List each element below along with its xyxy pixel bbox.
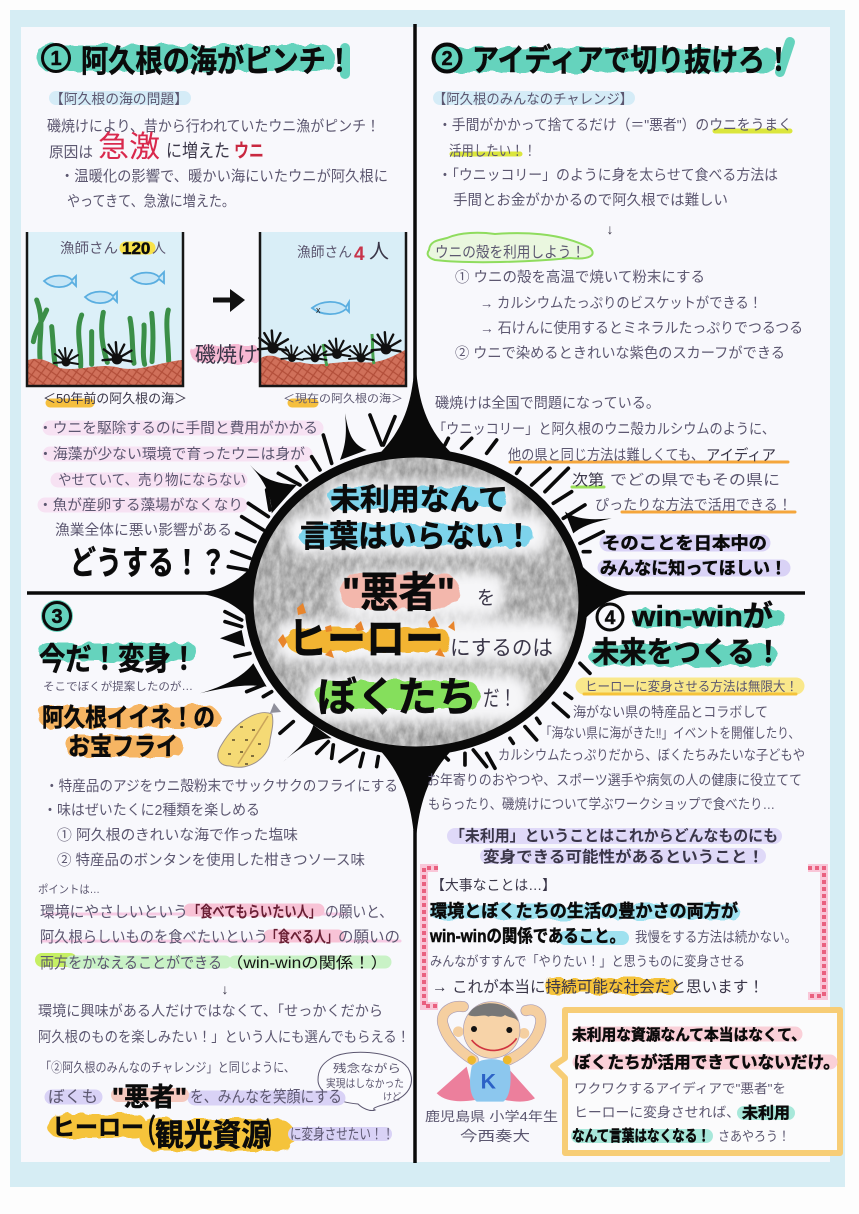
problem list with pink marker	[38, 420, 318, 539]
speech bubble: 残念ながら: 残念ながら	[333, 1061, 401, 1075]
icon: hero boy	[437, 1002, 541, 1102]
panel 1: 阿久根の海がピンチ	[27, 44, 406, 581]
intro text: 原因は	[49, 144, 93, 161]
points: 両方をかなえることができる	[40, 954, 222, 972]
wish line 1: "悪者"	[112, 1082, 187, 1112]
points: の願いと、	[325, 904, 393, 921]
yellow lead line: ヒーローに変身させる方法は無限大！	[585, 679, 798, 694]
heading highlight and title: 1	[50, 48, 62, 70]
small spikes	[200, 413, 612, 768]
slogan: ぼくたち	[317, 674, 477, 720]
illustration: sea today: 人	[369, 241, 389, 263]
wish line 1	[48, 1082, 342, 1112]
arrow down: ↓	[606, 221, 614, 237]
intro text	[47, 118, 388, 210]
illustration: sea 50 years ago	[27, 232, 183, 386]
proposal lead: そこでぼくが提案したのが…	[43, 679, 193, 693]
big compass points	[195, 358, 640, 850]
tourism text: 「②阿久根のみんなのチャレンジ」と同じように、	[40, 1060, 295, 1075]
problem list with pink marker: 漁業全体に悪い影響がある	[55, 522, 232, 539]
slogan: を	[477, 588, 495, 609]
examples: カルシウムたっぷりだから、ぼくたちみたいな子どもや	[498, 747, 805, 763]
green cloud label	[428, 233, 593, 262]
product name	[42, 704, 215, 761]
pink bead brackets	[424, 868, 824, 1006]
points: 環境にやさしいという	[40, 903, 188, 921]
problem list with pink marker: やせていて、売り物にならない	[58, 472, 246, 489]
wish line 1: ぼくも	[48, 1088, 98, 1106]
slogan: にするのは	[450, 637, 553, 660]
points: ポイントは…	[38, 883, 100, 896]
examples: もらったり、磯焼けについて学ぶワークショップで食べたり…	[428, 796, 775, 812]
seaweed	[33, 300, 169, 369]
wish line 2: ヒーロー	[52, 1114, 144, 1140]
yellow speech box: さあやろう！	[718, 1129, 790, 1144]
important section: 【大事なことは…】	[431, 877, 556, 893]
tourism text	[38, 1003, 410, 1075]
panel 4: win-winが未来をつくる	[424, 599, 840, 1153]
product description	[43, 778, 398, 869]
illustration: sea today: x	[316, 305, 321, 315]
wish line 2: （	[136, 1113, 156, 1149]
yellow speech box	[553, 1010, 840, 1153]
important section: 我慢をする方法は続かない。	[635, 929, 797, 945]
intro text: ウニ	[234, 140, 264, 162]
problem list with pink marker: ・ウニを駆除するのに手間と費用がかかる	[38, 420, 318, 437]
illustration: sea today: 4	[354, 244, 365, 265]
product description: ・味はぜいたくに2種類を楽しめる	[43, 802, 260, 819]
examples: お年寄りのおやつや、スポーツ選手や病気の人の健康に役立てて	[427, 772, 802, 788]
message in violet: 「未利用」ということはこれからどんなものにも	[450, 827, 778, 845]
nationwide message: 次第	[572, 472, 604, 489]
wish line 2: 観光資源	[155, 1118, 270, 1153]
examples: 「海ない県に海がきた‼」イベントを開催したり、	[540, 725, 800, 741]
yellow speech box: ヒーローに変身させれば、	[574, 1105, 740, 1120]
problem list with pink marker: ・海藻が少ない環境で育ったウニは身が	[38, 446, 306, 463]
green cloud label: ウニの殻を利用しよう！	[435, 244, 585, 261]
seabed and urchins	[261, 350, 405, 386]
wish line 1: を、みんなを笑顔にする	[190, 1088, 342, 1106]
illustration: sea 50 years ago: 漁師さん	[60, 240, 118, 256]
message in violet	[450, 827, 778, 866]
heading: 未来をつくる！	[592, 636, 782, 669]
heading: win-winが	[631, 599, 773, 633]
heading	[592, 599, 782, 669]
illustration: sea today	[258, 232, 406, 386]
yellow speech box: 未利用な資源なんて本当はなくて、	[572, 1025, 806, 1044]
points: の願いの	[338, 929, 400, 946]
nationwide message: アイディア	[706, 446, 776, 464]
slogan: だ！	[483, 686, 516, 711]
illustration: sea 50 years ago: 人	[152, 240, 166, 256]
call to action: みんなに知ってほしい！	[600, 559, 787, 578]
uses of the shell: → カルシウムたっぷりのビスケットができる！	[480, 295, 762, 312]
uses of the shell: → 石けんに使用するとミネラルたっぷりでつるつる	[480, 320, 803, 337]
icon: hero boy: K	[481, 1069, 497, 1093]
product name: お宝フライ	[68, 733, 178, 761]
heading highlight and title: アイディアで切り抜けろ！	[472, 43, 792, 78]
challenge list	[438, 117, 792, 209]
slogan	[288, 484, 553, 720]
caption: 50 years ago: ＜50年前の阿久根の海＞	[43, 391, 187, 406]
product description: ② 特産品のボンタンを使用した柑きつソース味	[57, 852, 365, 869]
arrow between illustrations	[213, 289, 245, 312]
author: 今西奏大	[460, 1128, 530, 1144]
points: 「食べてもらいたい人」	[188, 902, 321, 921]
nationwide message: 「ウニッコリー」と阿久根のウニ殻カルシウムのように、	[433, 421, 775, 438]
heading	[39, 600, 197, 677]
slogan: 言葉はいらない！	[300, 519, 533, 554]
icon: breaded fish fry	[218, 703, 281, 767]
graphite ball	[249, 453, 583, 751]
nationwide message: 他の県と同じ方法は難しくても、	[508, 447, 704, 464]
call to action: そのことを日本中の	[602, 534, 767, 553]
panel 2: アイディアで切り抜けろ	[428, 42, 803, 578]
heading highlight and title: 阿久根の海がピンチ！	[81, 44, 353, 79]
wish line 2	[52, 1113, 394, 1153]
fish	[44, 272, 164, 303]
tourism text: 環境に興味がある人だけではなくて、「せっかくだから	[38, 1003, 383, 1020]
slogan: 未利用なんて	[330, 484, 508, 517]
uses of the shell	[455, 269, 803, 362]
points	[38, 883, 400, 972]
points: 「食べる人」	[266, 927, 338, 946]
subheading: 【阿久根のみんなのチャレンジ】	[433, 91, 633, 107]
product name: 阿久根イイネ！の	[42, 704, 215, 732]
intro text: ・温暖化の影響で、暖かい海にいたウニが阿久根に	[60, 168, 388, 185]
product description: ① 阿久根のきれいな海で作った塩味	[57, 827, 298, 844]
subheading: 【阿久根の海の問題】	[50, 91, 188, 107]
call to action	[600, 534, 787, 578]
speech bubble: 残念ながら: けど	[383, 1092, 401, 1103]
heading: 3	[51, 606, 63, 628]
slogan: ヒーロー	[288, 615, 444, 664]
challenge list: ・手間がかかって捨てるだけ（＝"悪者"）のウニをうまく	[438, 117, 792, 134]
important section: win-winの関係であること。	[429, 926, 625, 946]
panel 3: 今だ！変身！	[38, 600, 411, 1153]
important section	[429, 877, 797, 996]
uses of the shell: ① ウニの殻を高温で焼いて粉末にする	[455, 269, 705, 286]
important section: みんながすすんで「やりたい！」と思うものに変身させる	[430, 954, 745, 969]
challenge list: 手間とお金がかかるので阿久根では難しい	[453, 192, 728, 209]
heading: 今だ！変身！	[39, 642, 197, 677]
yellow speech box: 未利用	[742, 1104, 790, 1122]
illustration: sea today: 漁師さん	[297, 244, 352, 260]
examples: 海がない県の特産品とコラボして	[573, 704, 768, 720]
nationwide message: 磯焼けは全国で問題になっている。	[435, 395, 660, 412]
important section: → これが本当に持続可能な社会だと思います！	[432, 978, 764, 996]
author	[425, 1109, 558, 1144]
heading highlight and title: 2	[441, 48, 453, 70]
illustration: sea 50 years ago: 120	[122, 239, 150, 258]
fish	[312, 302, 349, 314]
intro text: に増えた	[166, 141, 230, 161]
wish line 2: に変身させたい！！	[290, 1126, 394, 1143]
challenge list: ・「ウニッコリー」のように身を太らせて食べる方法は	[438, 167, 778, 184]
points: （win-winの関係！）	[226, 954, 388, 972]
label: 磯焼け: 磯焼け	[195, 344, 258, 367]
caption: today: ＜現在の阿久根の海＞	[283, 391, 403, 405]
centre burst with spikes	[200, 375, 630, 834]
product description: ・特産品のアジをウニ殻粉末でサックサクのフライにする	[45, 778, 398, 795]
message in violet: 変身できる可能性があるということ！	[483, 847, 764, 866]
points: 阿久根らしいものを食べたいという	[40, 928, 268, 946]
intro text: 急激	[98, 131, 160, 164]
uses of the shell: ② ウニで染めるときれいな紫色のスカーフができる	[455, 345, 785, 362]
nationwide message: ぴったりな方法で活用できる！	[595, 497, 792, 514]
yellow speech box: ぼくたちが活用できていないだけ。	[574, 1052, 840, 1072]
challenge list: 活用したい！！	[449, 143, 536, 160]
intro text: 磯焼けにより、昔から行われていたウニ漁がピンチ！	[47, 118, 380, 135]
heading: 4	[605, 608, 616, 629]
examples	[427, 704, 805, 812]
white blobs behind the slogan	[276, 482, 566, 722]
sparks	[278, 603, 455, 658]
arrow down: ↓	[222, 981, 228, 997]
nationwide message	[433, 395, 795, 514]
seabed and urchins	[28, 359, 182, 386]
wish line 2: ）	[266, 1118, 280, 1151]
author: 鹿児島県 小学4年生	[425, 1109, 558, 1124]
yellow speech box: ワクワクするアイディアで"悪者"を	[574, 1081, 786, 1096]
speech bubble: 残念ながら	[318, 1052, 411, 1111]
problem list with pink marker: ・魚が産卵する藻場がなくなり	[38, 497, 243, 514]
nationwide message: でどの県でもその県に	[610, 472, 780, 489]
intro text: やってきて、急激に増えた。	[67, 193, 235, 210]
important section: 環境とぼくたちの生活の豊かさの両方が	[430, 901, 738, 921]
tourism text: 阿久根のものを楽しみたい！」という人にも選んでもらえる！	[38, 1029, 410, 1046]
どうする: どうする！？	[70, 544, 226, 581]
yellow speech box: なんて言葉はなくなる！	[572, 1127, 710, 1145]
speech bubble: 残念ながら: 実現はしなかった	[326, 1077, 404, 1090]
slogan: "悪者"	[342, 569, 455, 616]
